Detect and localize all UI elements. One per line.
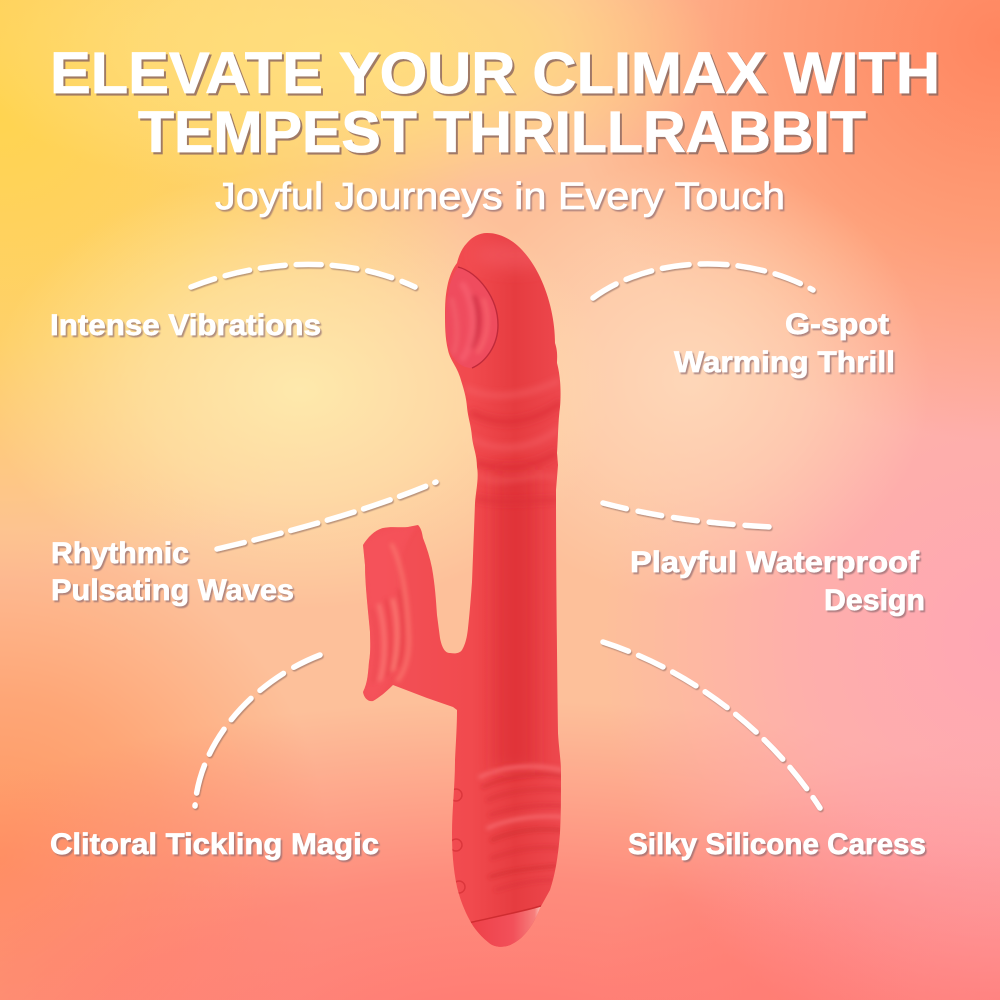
dashed curve: intense vibrations bbox=[191, 264, 415, 287]
title bbox=[50, 41, 940, 165]
subtitle: Joyful Journeys in Every Touch bbox=[215, 176, 785, 218]
dashed line: pulsating waves bbox=[217, 482, 436, 549]
label: playful waterproof design bbox=[630, 546, 925, 617]
handle ribs bbox=[480, 766, 562, 890]
dashed curve: clitoral tickling bbox=[195, 655, 320, 806]
product illustration bbox=[363, 233, 561, 947]
title: ELEVATE YOUR CLIMAX WITH bbox=[50, 41, 940, 106]
label: g-spot warming thrill bbox=[674, 308, 895, 379]
shaft shading bbox=[481, 240, 534, 766]
label: silky silicone caress: Silky Silicone Caress bbox=[628, 828, 926, 861]
label: g-spot warming thrill: G-spot bbox=[785, 308, 889, 341]
control buttons bbox=[450, 789, 465, 893]
label: rhythmic pulsating waves bbox=[51, 537, 294, 607]
label: playful waterproof design: Design bbox=[824, 584, 925, 617]
label: rhythmic pulsating waves: Rhythmic bbox=[51, 537, 189, 570]
dashed curve: g-spot warming bbox=[593, 264, 813, 298]
dashed curve: silky silicone bbox=[603, 642, 820, 808]
label: intense vibrations: Intense Vibrations bbox=[50, 309, 321, 342]
dashed line: waterproof bbox=[603, 503, 771, 527]
metal tip bbox=[470, 906, 541, 947]
label: rhythmic pulsating waves: Pulsating Waves bbox=[51, 574, 294, 607]
label: clitoral tickling magic: Clitoral Tickling Magic bbox=[50, 828, 379, 861]
shaft ribs bbox=[465, 380, 562, 502]
label: playful waterproof design: Playful Waterproof bbox=[630, 546, 920, 579]
suction head ridges bbox=[363, 526, 414, 690]
label: g-spot warming thrill: Warming Thrill bbox=[674, 346, 895, 379]
stimulator disc bbox=[446, 267, 498, 368]
title: TEMPEST THRILLRABBIT bbox=[138, 100, 866, 165]
